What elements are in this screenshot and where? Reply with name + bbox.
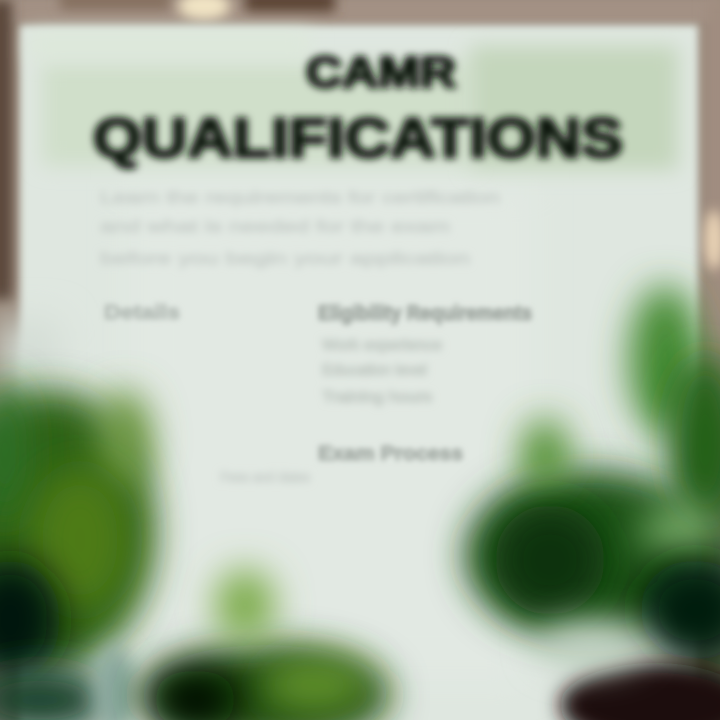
panel: green header band — [30, 32, 678, 170]
right column second heading: Exam Process — [318, 443, 463, 465]
plant: left foliage — [0, 380, 155, 720]
right column list — [322, 337, 442, 406]
title: QUALIFICATIONS — [93, 106, 623, 169]
text block: intro paragraph — [100, 188, 500, 268]
plant: bottom centre foliage — [140, 569, 390, 720]
plant: pot at bottom right — [538, 623, 720, 720]
title: CAMR — [306, 48, 456, 97]
right column heading: Eligibility Requirements — [318, 302, 532, 325]
text block: intro paragraph: Learn the requirements for certification — [100, 188, 500, 207]
text block: intro paragraph: and what is needed for the exam — [100, 217, 450, 236]
left column note: Fees and dates — [220, 469, 310, 486]
right column list: Work experience — [322, 337, 442, 354]
left column heading: Details — [104, 302, 180, 324]
right column list: Training hours — [322, 389, 432, 406]
title — [93, 48, 623, 169]
plant: right foliage — [465, 285, 720, 660]
right column list: Education level — [322, 362, 427, 379]
text block: intro paragraph: before you begin your application — [100, 249, 470, 268]
